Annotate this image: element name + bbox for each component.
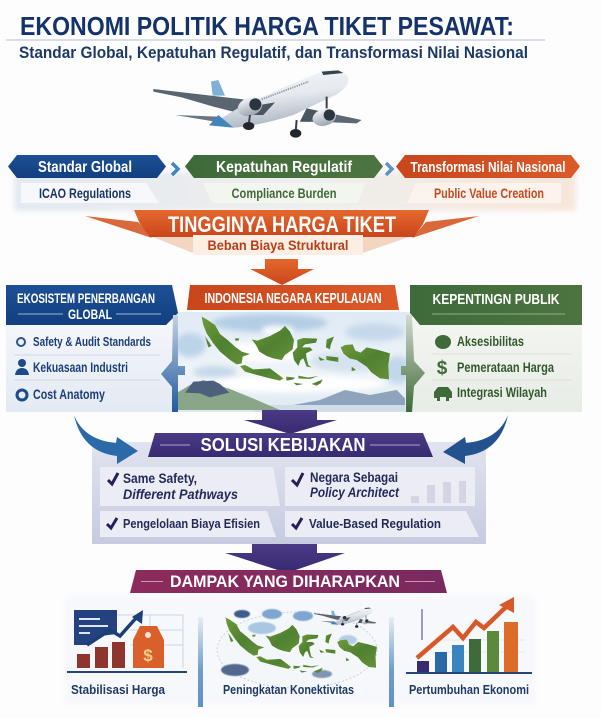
pillar: Kepatuhan Regulatif: Kepatuhan Regulatif — [216, 159, 353, 176]
item: cost anatomy: Cost Anatomy — [33, 387, 105, 402]
islands — [202, 317, 390, 386]
title — [6, 11, 545, 62]
panel: impact background — [65, 596, 535, 704]
item: pemerataan: Pemerataan Harga — [457, 360, 554, 375]
item: kekuasaan: Kekuasaan Industri — [33, 360, 128, 375]
panel: Ekosistem Penerbangan Global: GLOBAL — [68, 307, 112, 322]
card: Value-Based — [285, 511, 479, 537]
arrow: down to middle — [250, 259, 314, 285]
item: cost anatomy — [17, 387, 105, 402]
ICAO box — [21, 183, 159, 203]
arrow: chevron 1 — [172, 163, 178, 175]
item: safety — [17, 334, 151, 349]
divider — [198, 617, 203, 707]
subtitle: Standar Global, Kepatuhan Regulatif, dan Transformasi Nilai Nasional — [19, 44, 528, 62]
card: Negara Sebagai: Negara Sebagai — [310, 470, 398, 485]
Public Value box: Public Value Creation — [434, 186, 544, 201]
Public Value box — [407, 183, 561, 203]
icon: price stability chart: $ — [143, 646, 153, 665]
Compliance box — [203, 183, 365, 203]
heading: Dampak yang Diharapkan — [130, 570, 447, 593]
arrow: down to solusi — [244, 410, 337, 434]
label: Stabilisasi Harga: Stabilisasi Harga — [71, 682, 166, 697]
item: aksesibilitas — [435, 334, 524, 349]
icon: growth chart — [406, 597, 532, 674]
panel: Solusi Kebijakan background — [92, 442, 486, 544]
divider right — [389, 617, 394, 707]
label: Peningkatan Konektivitas: Peningkatan Konektivitas — [223, 683, 354, 697]
icon: connectivity map — [217, 607, 377, 688]
item: integrasi: Integrasi Wilayah — [457, 385, 547, 400]
icon: price stability chart — [67, 610, 187, 673]
panel: Ekosistem Penerbangan Global — [6, 285, 185, 412]
card: Same Safety: Different Pathways — [123, 487, 238, 502]
pillar: Standar Global: Standar Global — [38, 159, 132, 176]
card: Value-Based: Value-Based Regulation — [309, 516, 441, 531]
item: pemerataan — [437, 358, 554, 379]
card: Pengelolaan: Pengelolaan Biaya Efisien — [123, 516, 260, 531]
item: kekuasaan — [15, 359, 128, 375]
item: pemerataan: $ — [437, 358, 448, 379]
item: integrasi — [434, 385, 547, 401]
card: Same Safety — [100, 467, 280, 506]
title: EKONOMI POLITIK HARGA TIKET PESAWAT: — [20, 11, 514, 41]
card: Negara Sebagai: Policy Architect — [310, 485, 399, 500]
heading: Dampak yang Diharapkan: DAMPAK YANG DIHARAPKAN — [170, 573, 400, 591]
pillar: Kepatuhan Regulatif — [185, 155, 383, 203]
heading: Solusi Kebijakan: SOLUSI KEBIJAKAN — [200, 435, 366, 455]
banner: Tingginya Harga Tiket — [85, 210, 479, 255]
Compliance box: Compliance Burden — [232, 186, 336, 201]
pale band behind the three pillars — [14, 172, 576, 211]
heading: Solusi Kebijakan — [148, 433, 433, 457]
arrow: curved left — [74, 415, 138, 464]
arrow: down to dampak — [225, 544, 345, 573]
label: Pertumbuhan Ekonomi: Pertumbuhan Ekonomi — [409, 682, 529, 697]
arrow: blue side — [161, 315, 185, 412]
arrow: chevron 2 — [386, 163, 392, 175]
card: Pengelolaan — [100, 511, 276, 537]
card: Same Safety: Same Safety, — [123, 471, 197, 486]
pillar: Standar Global — [8, 155, 166, 203]
center header: Indonesia Negara Kepulauan — [187, 285, 399, 310]
panel: Ekosistem Penerbangan Global: EKOSISTEM PENERBANGAN — [17, 291, 155, 306]
card: Negara Sebagai — [285, 467, 475, 506]
panel: Kepentingn Publik — [401, 285, 582, 412]
item: safety: Safety & Audit Standards — [33, 334, 151, 349]
panel: map of Indonesia — [172, 312, 412, 412]
arrow: curved right — [443, 415, 508, 464]
item: aksesibilitas: Aksesibilitas — [457, 334, 524, 349]
panel: Kepentingn Publik: KEPENTINGN PUBLIK — [432, 291, 560, 308]
Beban Biaya Struktural: Beban Biaya Struktural — [208, 237, 348, 253]
ICAO box: ICAO Regulations — [39, 186, 131, 201]
mountains — [173, 380, 405, 412]
airplane illustration — [153, 70, 362, 138]
pillar: Transformasi Nilai Nasional — [396, 155, 580, 203]
arrow: green side — [401, 315, 425, 412]
banner: Tingginya Harga Tiket: TINGGINYA HARGA TIKET — [168, 212, 396, 237]
center header: Indonesia Negara Kepulauan: INDONESIA NEGARA KEPULAUAN — [204, 291, 382, 307]
